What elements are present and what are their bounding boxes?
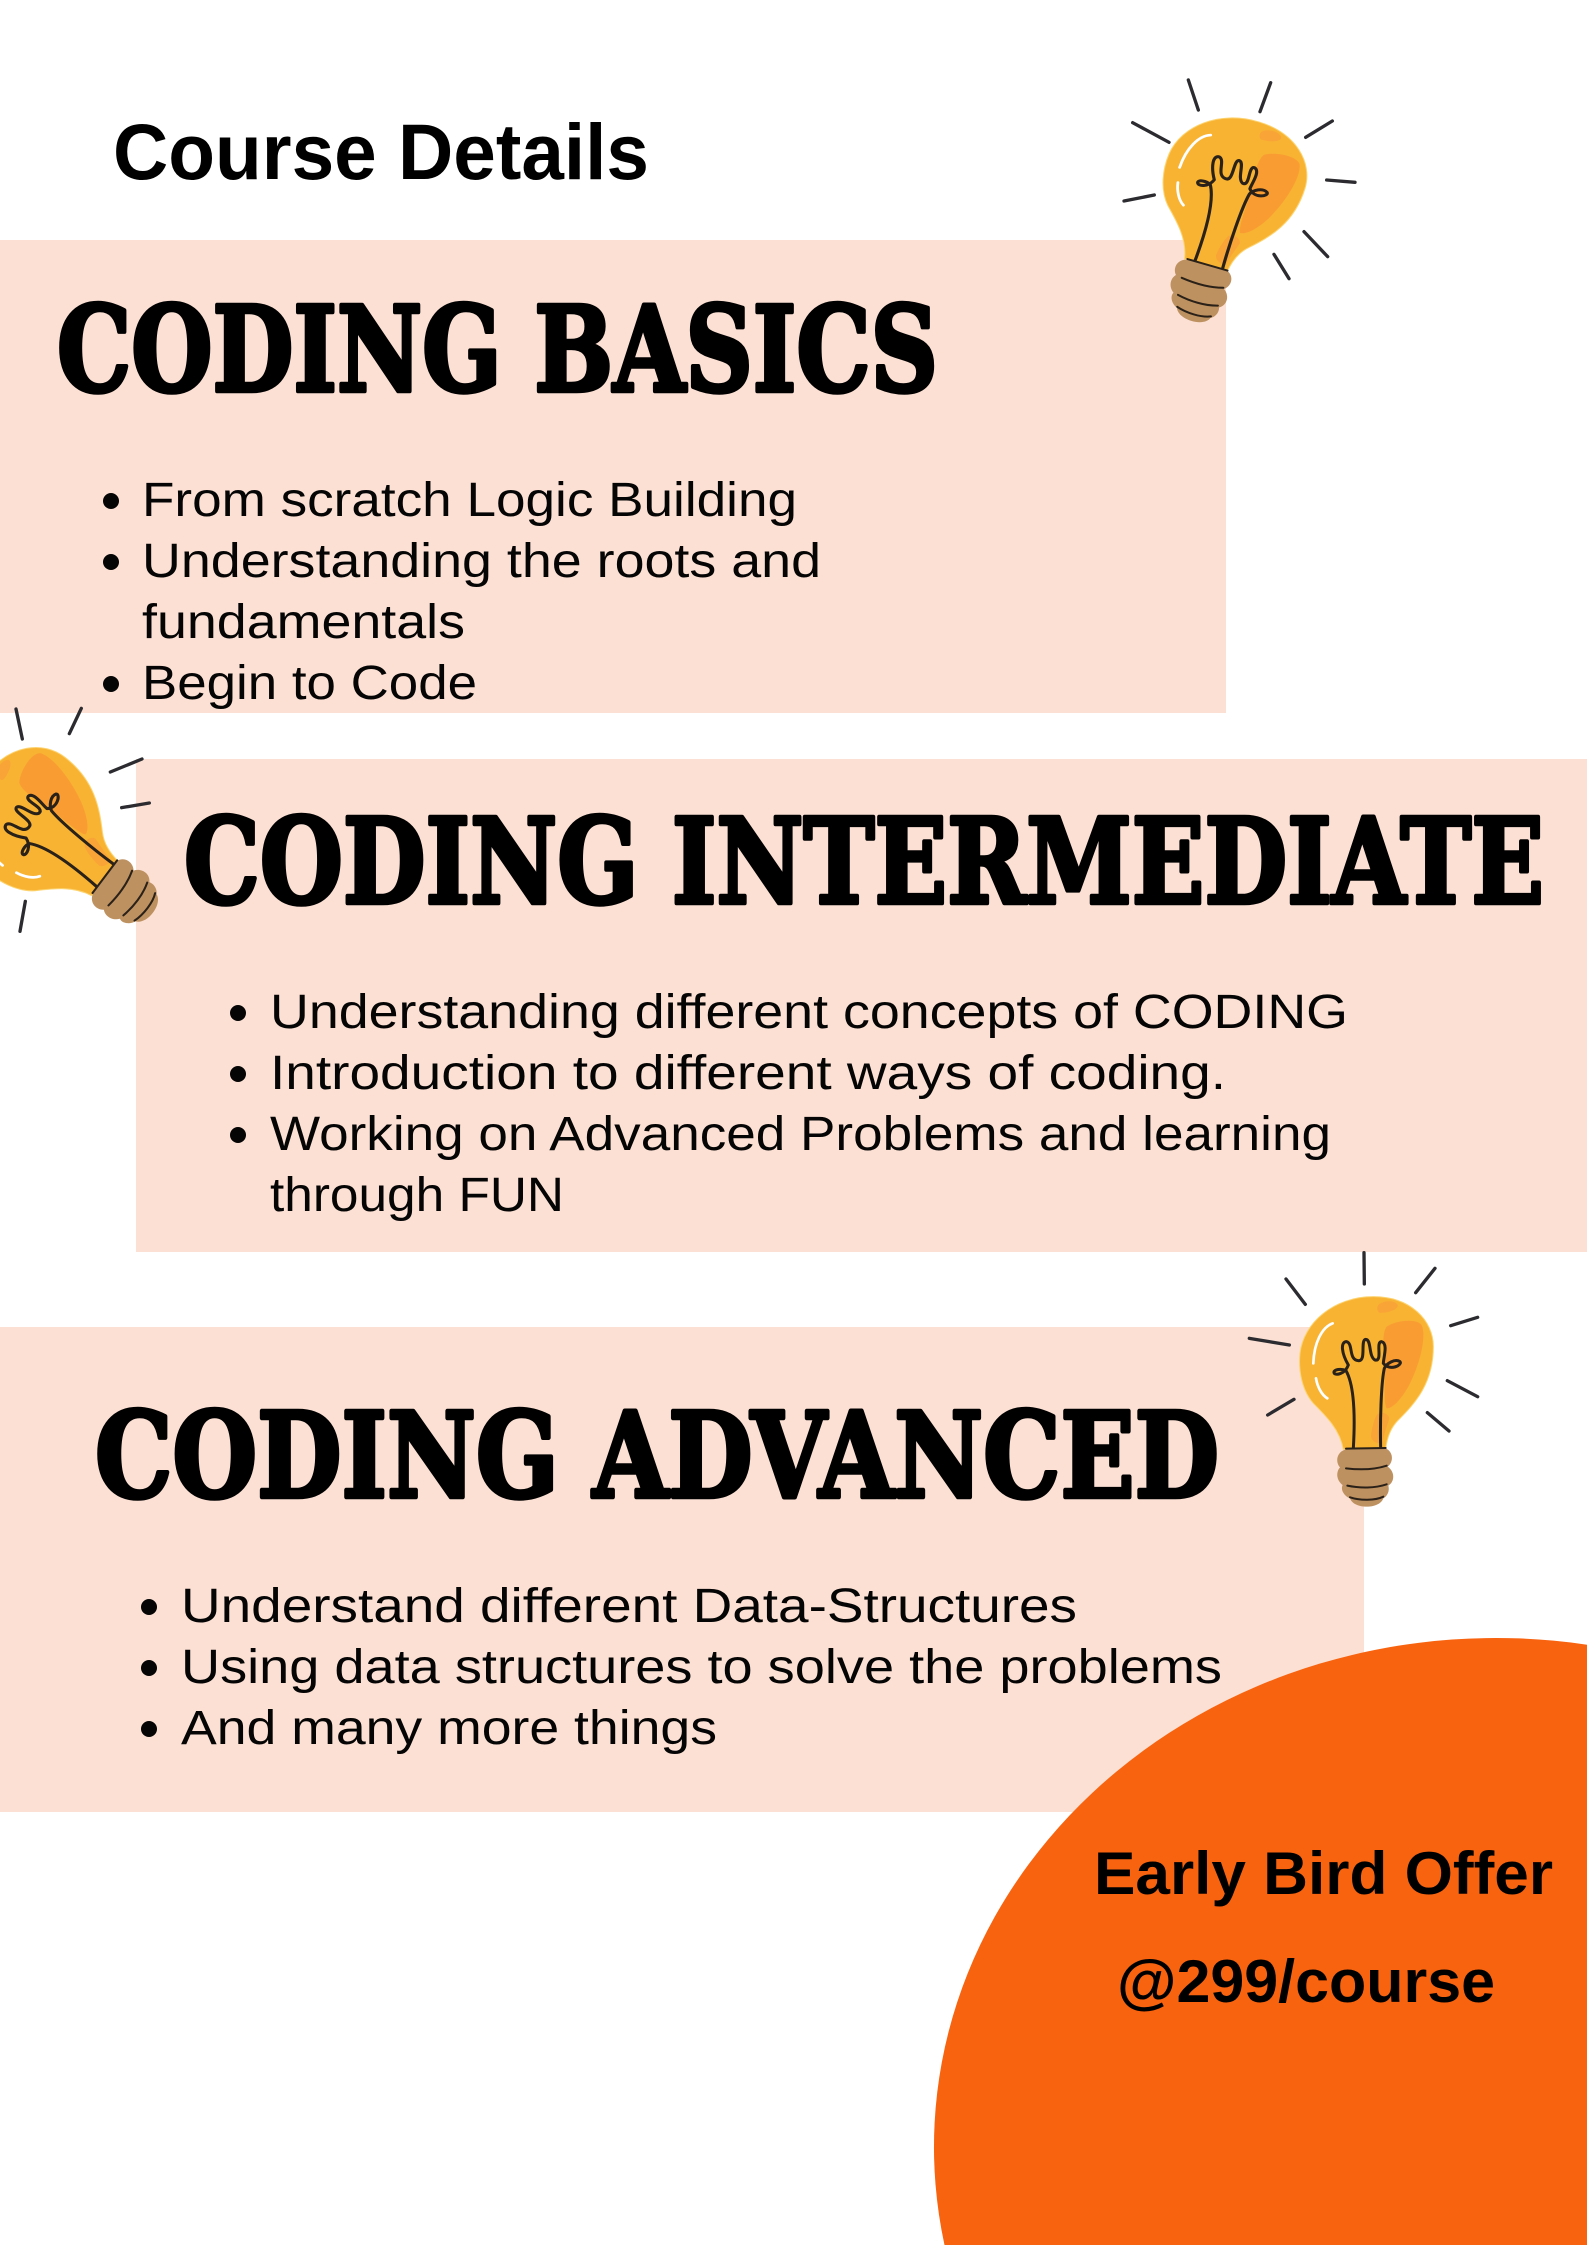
panel: coding advanced: [0, 1327, 1364, 1812]
bullet list: coding intermediate: [230, 986, 1348, 1222]
offer price: @299/course: [1117, 1948, 1495, 2015]
bullet list: coding basics: fundamentals: [142, 596, 465, 649]
panel: coding intermediate: [136, 759, 1587, 1252]
bullet list: coding intermediate: Introduction to different ways of coding.: [270, 1047, 1226, 1100]
bullet list: coding advanced: Using data structures to solve the problems: [181, 1641, 1222, 1694]
bullet list: coding intermediate: Working on Advanced Problems and learning: [270, 1108, 1331, 1161]
callout: early bird offer: [934, 1638, 1587, 2245]
bullet list: coding intermediate: through FUN: [270, 1169, 564, 1222]
icon: lightbulb middle right: [1249, 1253, 1478, 1507]
title: Course Details: [113, 107, 649, 196]
bullet list: coding basics: [103, 474, 821, 710]
bullet list: coding advanced: Understand different Data-Structures: [181, 1580, 1077, 1633]
heading: coding advanced: CODING ADVANCED: [95, 1386, 1219, 1525]
bullet list: coding intermediate: Understanding different concepts of CODING: [270, 986, 1348, 1039]
bullet list: coding basics: Understanding the roots and: [142, 535, 821, 588]
icon: lightbulb left: [0, 708, 195, 967]
icon: lightbulb top right: [1124, 80, 1355, 341]
heading: coding basics: CODING BASICS: [57, 280, 938, 419]
bullet list: coding advanced: And many more things: [181, 1702, 717, 1755]
offer text line 1: Early Bird Offer: [1094, 1840, 1553, 1907]
bullet list: coding basics: Begin to Code: [142, 657, 477, 710]
bullet list: coding basics: From scratch Logic Building: [142, 474, 797, 527]
bullet list: coding advanced: [141, 1580, 1222, 1755]
panel: coding basics: [0, 240, 1226, 713]
